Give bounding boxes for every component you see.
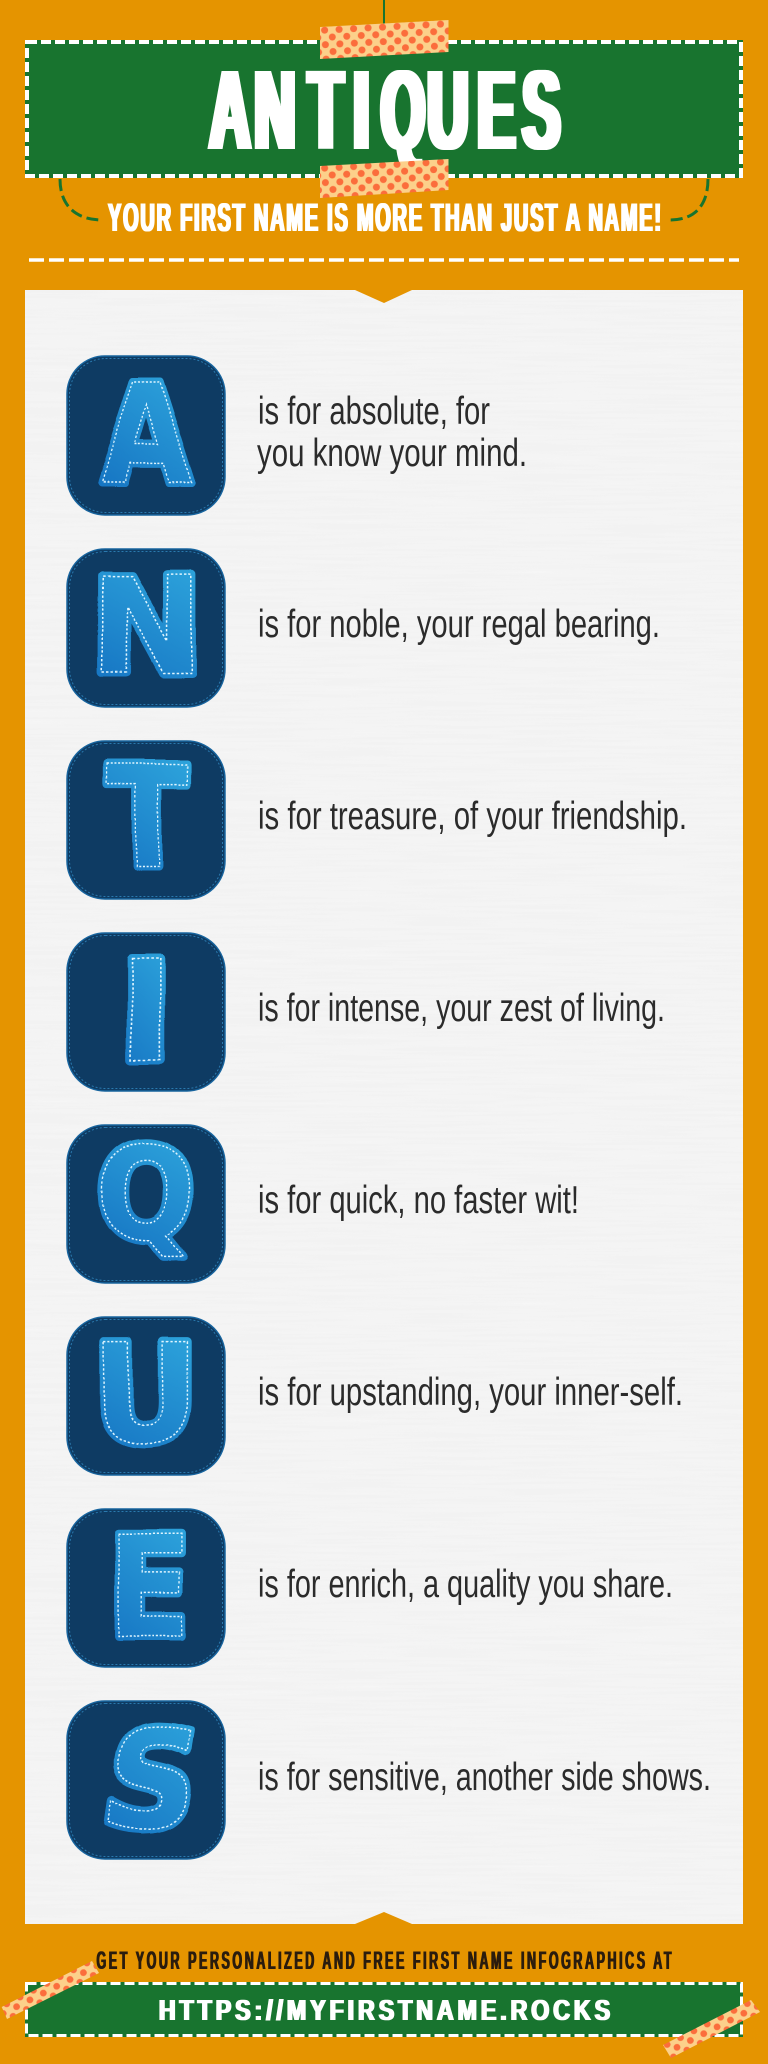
- row E: E: [106, 1506, 192, 1670]
- row S: S: [94, 1700, 210, 1861]
- row A: you know your mind.: [257, 432, 527, 475]
- tape: footer left: [2, 1961, 99, 2019]
- row N: [67, 548, 660, 707]
- row Q: is for quick, no faster wit!: [258, 1179, 579, 1222]
- row U: U: [92, 1315, 200, 1474]
- row A: A: [100, 354, 193, 517]
- tape: top: [320, 20, 448, 59]
- row Q: Q: [96, 1119, 196, 1269]
- hanging green line: [383, 0, 385, 26]
- row I: I: [118, 931, 174, 1094]
- dashed divider: [29, 258, 739, 262]
- title: ANTIQUES: [210, 47, 560, 173]
- row I: [67, 931, 665, 1094]
- footer banner: [25, 1982, 743, 2037]
- row E: [67, 1506, 673, 1670]
- footer url: HTTPS://MYFIRSTNAME.ROCKS: [159, 1993, 610, 2027]
- row N: N: [89, 548, 205, 705]
- tape: bottom of banner: [320, 159, 448, 198]
- title banner: [25, 40, 743, 178]
- row T: [67, 737, 687, 902]
- row E: E: [106, 1506, 192, 1670]
- row A: A: [100, 354, 193, 517]
- row Q: Q: [96, 1119, 196, 1269]
- row S: S: [94, 1700, 210, 1861]
- tape: footer right: [663, 2000, 760, 2058]
- row T: T: [106, 737, 187, 902]
- row N: N: [89, 548, 205, 705]
- row T: T: [106, 737, 187, 902]
- row Q: [67, 1119, 579, 1283]
- row S: [67, 1700, 711, 1861]
- footer call to action: GET YOUR PERSONALIZED AND FREE FIRST NAME INFOGRAPHICS AT: [96, 1947, 672, 1975]
- row U: U: [92, 1315, 200, 1474]
- row A: is for absolute, for: [258, 390, 490, 433]
- row I: I: [118, 931, 174, 1094]
- panel: letters: [25, 290, 743, 1924]
- row A: [67, 354, 527, 517]
- subtitle: YOUR FIRST NAME IS MORE THAN JUST A NAME!: [108, 194, 661, 240]
- row U: [67, 1315, 683, 1475]
- connector curves: [60, 179, 708, 220]
